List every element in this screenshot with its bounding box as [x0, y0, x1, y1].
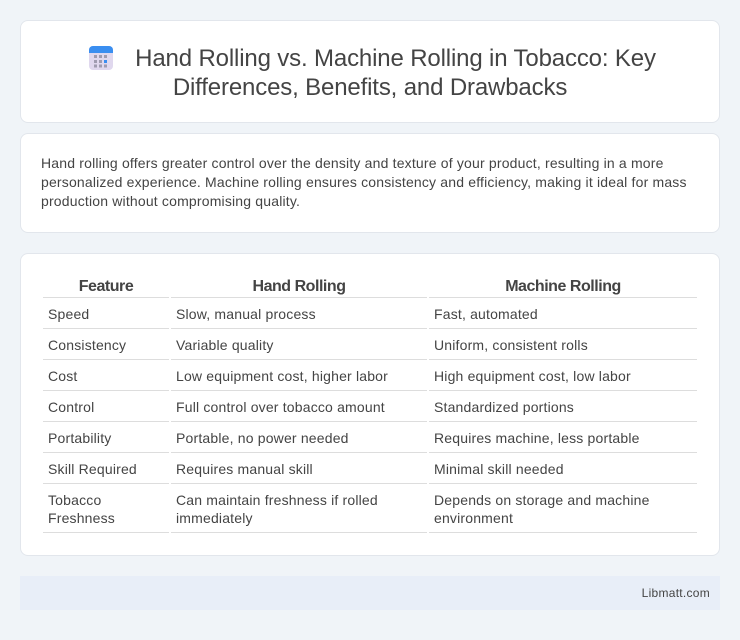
comparison table: Variable quality	[176, 337, 274, 353]
row: Control: Control	[48, 399, 94, 415]
intro text	[41, 155, 687, 209]
intro text: production without compromising quality.	[41, 193, 300, 209]
comparison table: Standardized portions	[434, 399, 574, 415]
footer bar	[20, 576, 720, 610]
icon: calendar	[89, 46, 113, 70]
comparison table: Can maintain freshness if rolled	[176, 492, 378, 508]
row: Tobacco Freshness	[48, 492, 115, 526]
intro text: Hand rolling offers greater control over the density and texture of your product, resulting in a more	[41, 155, 664, 171]
comparison table: Slow, manual process	[176, 306, 316, 322]
row: Cost: Cost	[48, 368, 78, 384]
comparison table: Depends on storage and machine	[434, 492, 650, 508]
row: Consistency: Consistency	[48, 337, 126, 353]
panel: comparison table card	[20, 253, 720, 556]
comparison table	[43, 278, 697, 533]
panel: intro card	[20, 133, 720, 233]
comparison table: Fast, automated	[434, 306, 538, 322]
row: Tobacco Freshness: Tobacco	[48, 492, 101, 508]
comparison table: environment	[434, 510, 513, 526]
comparison table: Requires manual skill	[176, 461, 313, 477]
panel: title card	[20, 20, 720, 123]
comparison table: Full control over tobacco amount	[176, 399, 385, 415]
comparison table: Requires machine, less portable	[434, 430, 640, 446]
title: Hand Rolling vs. Machine Rolling in Tobacco: Key	[135, 45, 656, 72]
row: Tobacco Freshness: Freshness	[48, 510, 115, 526]
row: Portability: Portability	[48, 430, 111, 446]
intro text: personalized experience. Machine rolling ensures consistency and efficiency, making it ideal for mass	[41, 174, 687, 190]
comparison table: immediately	[176, 510, 253, 526]
row: Skill Required: Skill Required	[48, 461, 137, 477]
header: Machine Rolling: Machine Rolling	[505, 278, 621, 295]
header: Hand Rolling: Hand Rolling	[252, 278, 346, 295]
comparison table: Uniform, consistent rolls	[434, 337, 588, 353]
header: Feature: Feature	[79, 278, 133, 295]
comparison table: High equipment cost, low labor	[434, 368, 631, 384]
title	[135, 45, 656, 101]
row: Speed: Speed	[48, 306, 89, 322]
comparison table: Low equipment cost, higher labor	[176, 368, 388, 384]
comparison table: Minimal skill needed	[434, 461, 564, 477]
comparison table: Portable, no power needed	[176, 430, 349, 446]
title: Differences, Benefits, and Drawbacks	[173, 74, 567, 101]
footer text: Libmatt.com	[642, 586, 710, 600]
